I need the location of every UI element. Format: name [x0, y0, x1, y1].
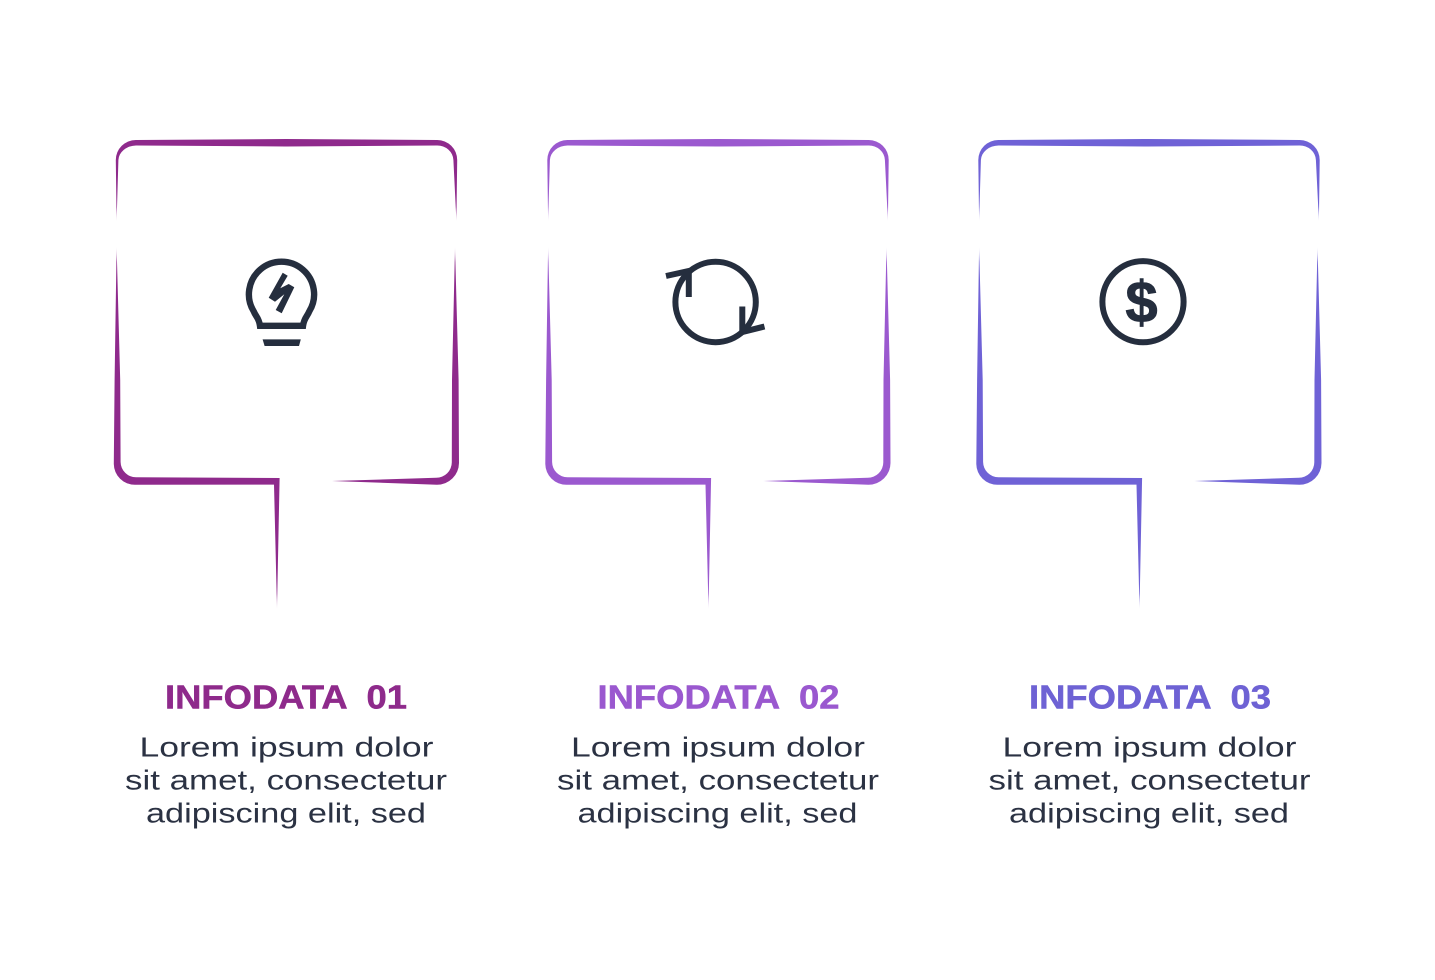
panel: infodata 02: [545, 139, 890, 828]
description 01: sit amet, consectetur: [125, 764, 447, 795]
description 03: [988, 731, 1310, 828]
icon: light bulb: [249, 262, 314, 346]
speech bubble frame 01: [114, 139, 459, 609]
heading 03: INFODATA 03: [1029, 679, 1271, 716]
description 03: adipiscing elit, sed: [1009, 797, 1289, 828]
description 02: Lorem ipsum dolor: [571, 731, 865, 762]
heading 01: INFODATA 01: [165, 679, 407, 716]
description 01: Lorem ipsum dolor: [140, 731, 434, 762]
panel: infodata 03: [976, 139, 1322, 828]
heading 02: INFODATA 02: [598, 679, 840, 716]
icon: circular arrows: [666, 262, 764, 342]
description 02: adipiscing elit, sed: [578, 797, 858, 828]
description 03: sit amet, consectetur: [988, 764, 1310, 795]
icon: dollar coin: [1102, 261, 1184, 342]
icon: dollar coin: $: [1125, 270, 1158, 335]
description 01: [125, 731, 447, 828]
panel: infodata 01: [114, 139, 459, 828]
speech bubble frame 03: [976, 139, 1322, 609]
description 02: [557, 731, 879, 828]
description 02: sit amet, consectetur: [557, 764, 879, 795]
speech bubble frame 02: [545, 139, 890, 609]
description 01: adipiscing elit, sed: [146, 797, 426, 828]
description 03: Lorem ipsum dolor: [1002, 731, 1296, 762]
